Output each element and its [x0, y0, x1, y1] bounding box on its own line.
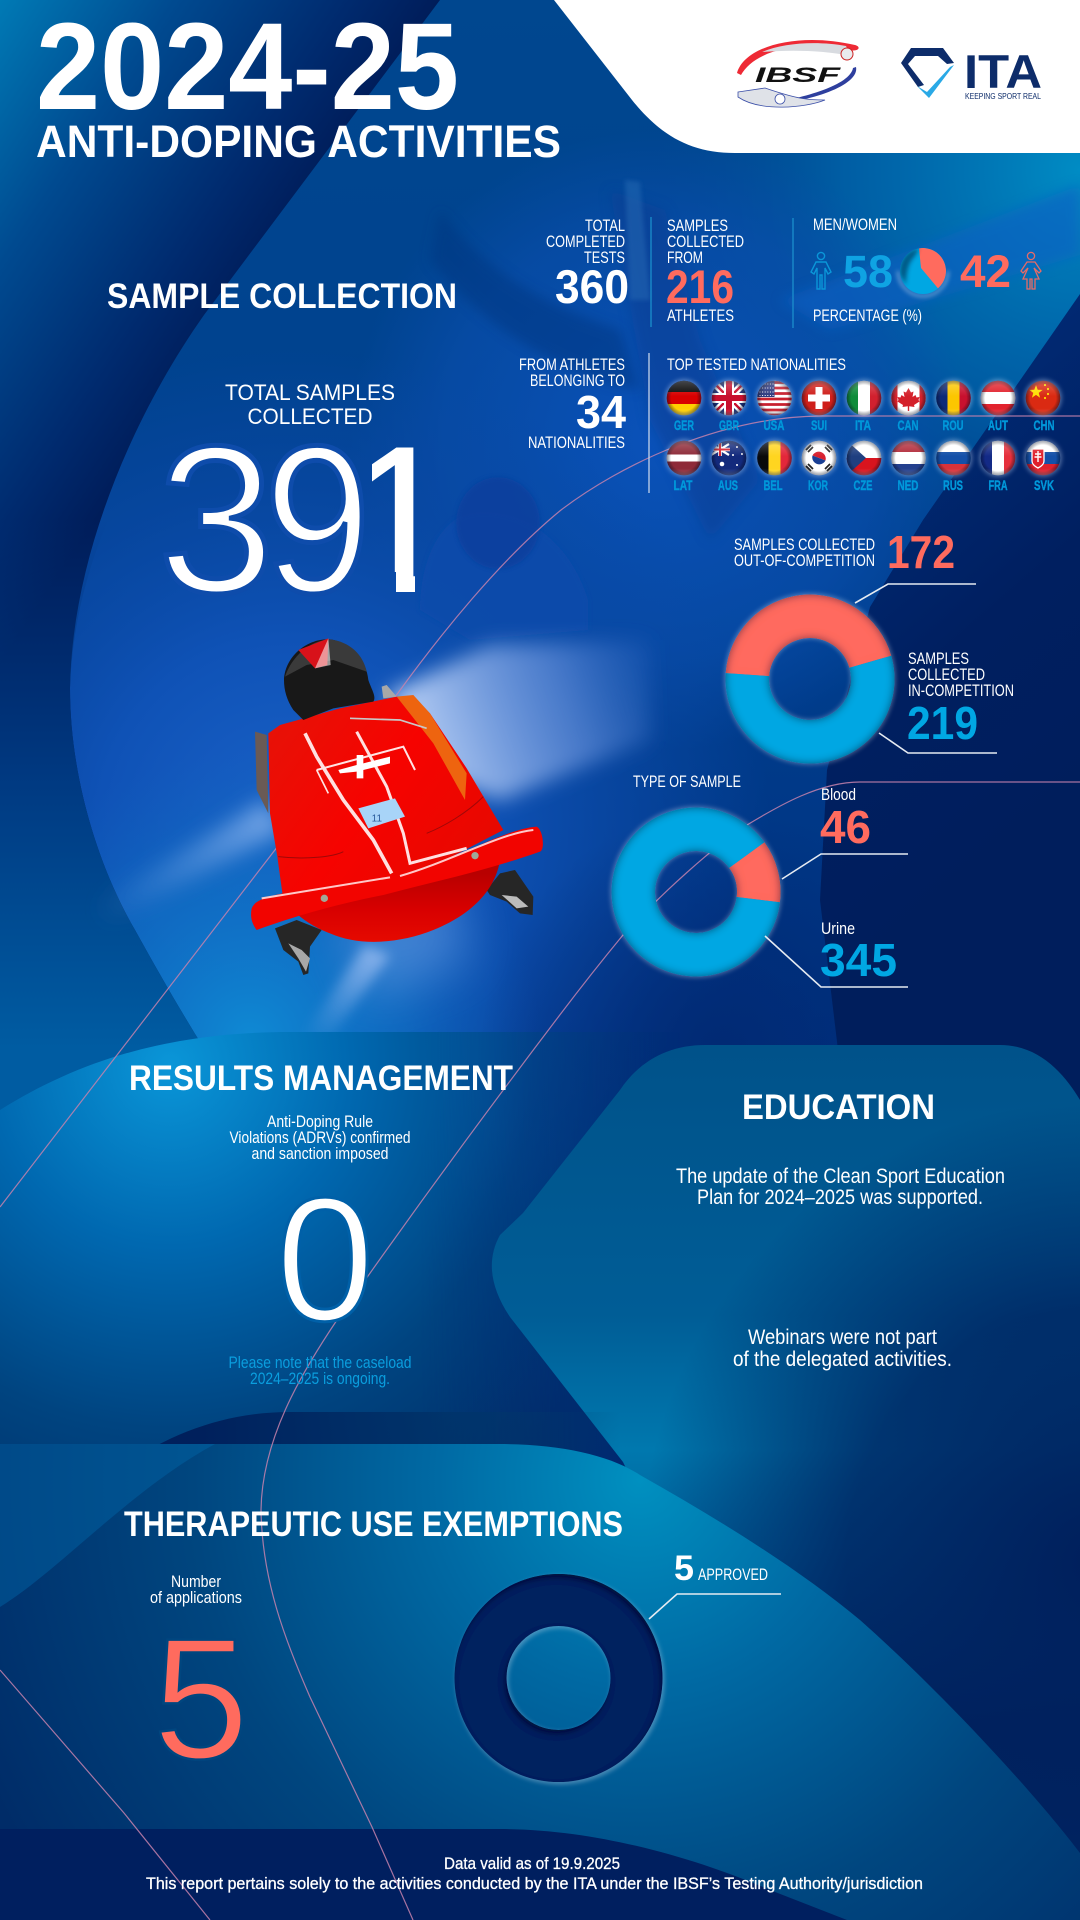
flag labels: CZE: [854, 478, 872, 493]
stat: athlete nationalities: NATIONALITIES: [528, 433, 625, 452]
text: ADRV description: Anti-Doping Rule: [267, 1112, 373, 1131]
text: ADRV description: [230, 1112, 410, 1163]
text: number of applications: [150, 1572, 242, 1607]
big number 391: [166, 443, 415, 592]
stat: athlete nationalities: [519, 355, 626, 452]
callout: urine: 345: [820, 934, 897, 986]
callout: out-of-competition: SAMPLES COLLECTED: [734, 535, 875, 554]
stat: total completed tests: TESTS: [584, 248, 625, 267]
text: education plan: Plan for 2024–2025 was supported.: [697, 1186, 983, 1209]
flag: FRA: [979, 439, 1017, 477]
stat: athlete nationalities: 34: [576, 386, 626, 438]
flag: CHN: [1024, 379, 1062, 417]
flag labels: FRA: [988, 478, 1008, 493]
flag labels: CHN: [1034, 418, 1054, 433]
flag labels: KOR: [808, 478, 828, 493]
stat: samples collected from athletes: [666, 216, 744, 325]
callout: urine: Urine: [821, 919, 855, 938]
flag labels: SUI: [811, 418, 827, 433]
big number 0: 0: [276, 1162, 374, 1358]
stat: men and women percentage: [811, 215, 1041, 325]
stat: men and women percentage: 58: [843, 246, 893, 297]
stat: samples collected from athletes: COLLECTED: [667, 232, 744, 251]
stat: total completed tests: COMPLETED: [546, 232, 625, 251]
text: education plan: [676, 1165, 1005, 1209]
callout: urine: [765, 919, 908, 987]
flag: KOR: [800, 439, 838, 477]
heading: results management: RESULTS MANAGEMENT: [129, 1059, 513, 1098]
callout: blood: 46: [820, 801, 871, 853]
stat: athlete nationalities: FROM ATHLETES: [519, 355, 625, 374]
flag labels: LAT: [674, 478, 693, 493]
big number 391: 9: [264, 402, 371, 637]
flag: SVK: [1024, 439, 1062, 477]
stat: men and women percentage: MEN/WOMEN: [813, 215, 897, 234]
chart: TUE approved donut: [480, 1600, 638, 1758]
icon: woman: [1021, 252, 1041, 289]
logo: ITA: KEEPING SPORT REAL: [965, 92, 1041, 101]
heading: education: EDUCATION: [742, 1088, 935, 1127]
callout: in-competition: IN-COMPETITION: [908, 681, 1014, 700]
faint bobsled photo: [420, 180, 1080, 640]
logo: ITA: ITA: [964, 45, 1042, 98]
heading: total samples collected: [225, 380, 395, 429]
heading: total samples collected: COLLECTED: [248, 404, 372, 429]
flag labels: GBR: [719, 418, 739, 433]
big number 5: 5: [153, 1603, 249, 1795]
callout: out-of-competition: 172: [887, 526, 955, 578]
flag: NED: [890, 439, 928, 477]
stat: samples collected from athletes: FROM: [667, 248, 703, 267]
text: number of applications: Number: [171, 1572, 221, 1591]
stat: total completed tests: 360: [555, 260, 629, 313]
dark curved shape: [0, 1412, 620, 1607]
callout: approved: 5: [674, 1549, 694, 1588]
flag labels: CAN: [898, 418, 918, 433]
callout: approved: APPROVED: [698, 1565, 768, 1584]
flag labels: RUS: [943, 478, 963, 493]
flag: AUS: [710, 439, 748, 477]
light beams behind sled: [95, 640, 650, 1045]
title: 2024-25: [36, 0, 459, 136]
callout: blood: Blood: [821, 785, 856, 804]
flag: BEL: [756, 439, 794, 477]
flag labels: USA: [764, 418, 785, 433]
note: caseload: Please note that the caseload: [228, 1353, 412, 1372]
flag: ROU: [934, 379, 972, 417]
chart: men women pie: [898, 246, 948, 296]
flag: USA: [756, 379, 794, 417]
stat: men and women percentage: PERCENTAGE (%): [813, 306, 922, 325]
stat: samples collected from athletes: 216: [666, 260, 734, 313]
flag labels: SVK: [1034, 478, 1054, 493]
footer note: [146, 1854, 923, 1893]
flag: AUT: [979, 379, 1017, 417]
heading: sample collection: SAMPLE COLLECTION: [107, 277, 457, 316]
flags grid: [665, 379, 1062, 493]
flag: CZE: [845, 439, 883, 477]
footer note: Data valid as of 19.9.2025: [444, 1854, 620, 1873]
callout: blood: [782, 785, 908, 879]
note: caseload: [228, 1353, 412, 1388]
callout: in-competition: COLLECTED: [908, 665, 985, 684]
footer note: This report pertains solely to the activities conducted by the ITA under the IBSF’s Testing Authority/jurisdiction: [146, 1874, 923, 1893]
bobsled illustration: [251, 638, 543, 975]
text: webinars: Webinars were not part: [748, 1326, 937, 1349]
text: webinars: [733, 1326, 952, 1371]
title: ANTI-DOPING ACTIVITIES: [36, 116, 561, 167]
callout: approved: [649, 1549, 781, 1619]
flag labels: [674, 418, 1054, 493]
note: caseload: 2024–2025 is ongoing.: [250, 1369, 390, 1388]
flag: SUI: [800, 379, 838, 417]
stat: men and women percentage: 42: [960, 246, 1011, 297]
panel: therapeutic use exemptions background: [0, 1444, 1080, 1920]
stat: samples collected from athletes: ATHLETES: [667, 306, 734, 325]
heading: type of sample: TYPE OF SAMPLE: [633, 772, 741, 791]
header white panel: [554, 0, 1080, 153]
flag labels: AUT: [988, 418, 1009, 433]
logo: ITA: [901, 45, 1042, 101]
chart: in and out of competition donut: [725, 595, 894, 764]
flag: RUS: [934, 439, 972, 477]
callout: out-of-competition: [734, 526, 976, 603]
logo: IBSF: IBSF: [755, 64, 842, 87]
pink curve lines: [0, 416, 1080, 1920]
flag labels: GER: [674, 418, 694, 433]
flag: GER: [665, 379, 703, 417]
text: webinars: of the delegated activities.: [733, 1348, 952, 1371]
callout: in-competition: [879, 649, 1014, 753]
flag labels: BEL: [764, 478, 782, 493]
flag labels: ROU: [942, 418, 964, 433]
stat: total completed tests: TOTAL: [585, 216, 625, 235]
bobsled illustration: 11: [372, 814, 382, 825]
callout: in-competition: 219: [907, 697, 978, 749]
heading: top tested nationalities: TOP TESTED NATIONALITIES: [667, 355, 846, 374]
flag: GBR: [710, 379, 748, 417]
chart: type of sample donut: [612, 807, 781, 976]
panel: education background: [492, 1045, 1080, 1920]
flag labels: ITA: [855, 418, 871, 433]
logo: IBSF: [737, 40, 859, 107]
heading: total samples collected: TOTAL SAMPLES: [225, 380, 395, 405]
flag: ITA: [845, 379, 883, 417]
flag: LAT: [665, 439, 703, 477]
flag labels: NED: [898, 478, 919, 493]
callout: in-competition: SAMPLES: [908, 649, 969, 668]
stat: athlete nationalities: BELONGING TO: [530, 371, 625, 390]
text: number of applications: of applications: [150, 1588, 242, 1607]
stat: samples collected from athletes: SAMPLES: [667, 216, 728, 235]
text: ADRV description: Violations (ADRVs) confirmed: [230, 1128, 410, 1147]
footer band background: [0, 1829, 847, 1920]
text: education plan: The update of the Clean Sport Education: [676, 1165, 1005, 1188]
flag labels: AUS: [718, 478, 738, 493]
text: ADRV description: and sanction imposed: [252, 1144, 388, 1163]
panel: results management background: [0, 1032, 562, 1444]
icon: man: [811, 252, 831, 289]
callout: out-of-competition: OUT-OF-COMPETITION: [734, 551, 875, 570]
big number 391: 3: [158, 402, 275, 637]
big number 391: 1: [342, 402, 459, 637]
heading: therapeutic use exemptions: THERAPEUTIC USE EXEMPTIONS: [124, 1505, 623, 1544]
stat: total completed tests: [546, 216, 629, 313]
flag: CAN: [890, 379, 928, 417]
